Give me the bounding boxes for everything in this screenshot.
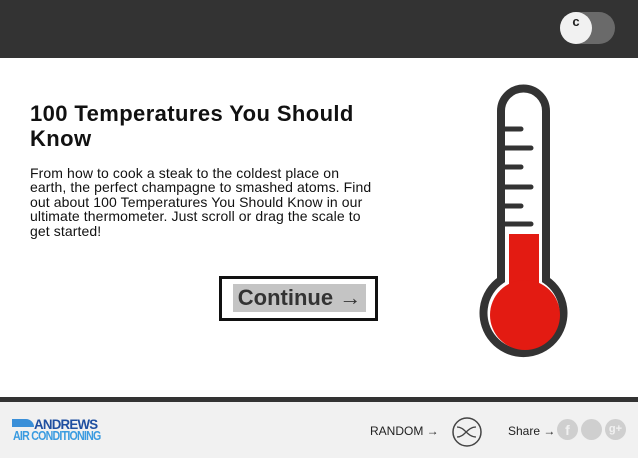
logo: ANDREWS [34,416,97,432]
toggle switch [560,12,615,44]
icons: social: g+ [609,423,622,435]
toggle switch: c [572,14,580,29]
header bar [0,0,638,58]
intro text: earth, the perfect champagne to smashed atoms. Find [30,179,371,195]
random link: RANDOM → [370,424,439,438]
icon: shuffle [452,417,482,447]
icons: social: f [565,422,570,438]
intro text: From how to cook a steak to the coldest place on [30,165,339,181]
intro text: out about 100 Temperatures You Should Know in our [30,194,362,210]
share: Share → [508,424,555,438]
continue button: Continue → [238,285,361,310]
logo [12,416,101,443]
intro text: get started! [30,223,101,239]
footer [0,397,638,458]
title: Know [30,126,91,151]
intro text: ultimate thermometer. Just scroll or drag the scale to [30,208,361,224]
title [30,101,354,151]
logo: AIR CONDITIONING [13,429,101,443]
continue button [219,276,378,321]
intro text [30,165,371,239]
title: 100 Temperatures You Should [30,101,354,126]
icons: social [557,419,626,440]
